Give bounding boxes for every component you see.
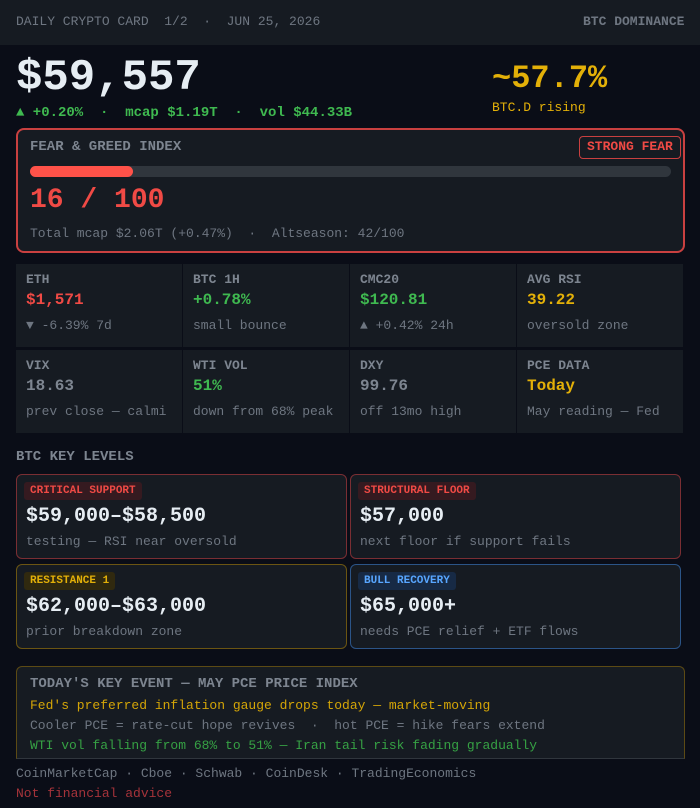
- metric: VIX: [16, 350, 182, 433]
- market cap and altseason: Total mcap $2.06T (+0.47%) · Altseason: 42/100: [30, 226, 404, 241]
- BTC dominance note: BTC.D rising: [492, 100, 586, 115]
- header right label: BTC DOMINANCE: [583, 14, 684, 29]
- note: prior breakdown zone: [26, 624, 182, 639]
- panel: fear and greed: [16, 128, 685, 253]
- BTC price: $59,557: [16, 53, 201, 103]
- price: $65,000+: [360, 595, 456, 618]
- price range: $62,000–$63,000: [26, 595, 206, 618]
- level card: structural floor: [350, 474, 681, 559]
- badge: CRITICAL SUPPORT: [30, 485, 136, 497]
- sources: CoinMarketCap · Cboe · Schwab · CoinDesk · TradingEconomics: [16, 766, 476, 781]
- metric grid: [16, 264, 683, 433]
- metric: VIX: VIX: [26, 358, 49, 373]
- metric: PCE DATA: Today: [527, 377, 575, 395]
- metric: PCE DATA: [517, 350, 683, 433]
- badge: [358, 572, 456, 590]
- badge: BULL RECOVERY: [364, 575, 450, 587]
- badge: [24, 482, 142, 500]
- event line: grey: Cooler PCE = rate-cut hope revives · hot PCE = hike fears extend: [30, 718, 545, 733]
- metric: BTC 1H: BTC 1H: [193, 272, 240, 287]
- metric: WTI VOL: down from 68% peak: [193, 404, 333, 419]
- metric: ETH: $1,571: [26, 291, 84, 309]
- metric: ETH: ETH: [26, 272, 49, 287]
- strong fear badge: STRONG FEAR: [587, 139, 673, 154]
- metric: DXY: DXY: [360, 358, 383, 373]
- metric: WTI VOL: [183, 350, 349, 433]
- metric: CMC20: [350, 264, 516, 347]
- metric: DXY: off 13mo high: [360, 404, 461, 419]
- badge: [24, 572, 115, 590]
- fear and greed heading: FEAR & GREED INDEX: [30, 139, 181, 155]
- metric: AVG RSI: AVG RSI: [527, 272, 582, 287]
- header bar: [0, 0, 700, 45]
- metric: VIX: prev close — calmi: [26, 404, 166, 419]
- gauge fill: [30, 166, 133, 177]
- gauge track: [30, 166, 671, 177]
- metric: WTI VOL: 51%: [193, 377, 222, 395]
- event heading: TODAY'S KEY EVENT — MAY PCE PRICE INDEX: [30, 676, 358, 692]
- key levels heading: BTC KEY LEVELS: [16, 449, 134, 465]
- BTC dominance value: ~57.7%: [492, 60, 607, 97]
- metric: PCE DATA: PCE DATA: [527, 358, 589, 373]
- metric: PCE DATA: May reading — Fed: [527, 404, 660, 419]
- badge: [358, 482, 476, 500]
- note: needs PCE relief + ETF flows: [360, 624, 578, 639]
- metric: AVG RSI: [517, 264, 683, 347]
- metric: DXY: 99.76: [360, 377, 408, 395]
- metric: AVG RSI: 39.22: [527, 291, 575, 309]
- metric: BTC 1H: +0.78%: [193, 291, 251, 309]
- price range: $59,000–$58,500: [26, 505, 206, 528]
- panel: key event: [16, 666, 685, 759]
- metric: CMC20: ▲ +0.42% 24h: [360, 318, 454, 333]
- metric: VIX: 18.63: [26, 377, 74, 395]
- metric: WTI VOL: WTI VOL: [193, 358, 248, 373]
- metric: ETH: ▼ -6.39% 7d: [26, 318, 112, 333]
- metric: BTC 1H: small bounce: [193, 318, 287, 333]
- note: testing — RSI near oversold: [26, 534, 237, 549]
- event line: amber: Fed's preferred inflation gauge drops today — market-moving: [30, 698, 490, 713]
- metric: DXY: [350, 350, 516, 433]
- metric: BTC 1H: [183, 264, 349, 347]
- badge: STRUCTURAL FLOOR: [364, 485, 470, 497]
- metric: CMC20: CMC20: [360, 272, 399, 287]
- price change stats: ▲ +0.20% · mcap $1.19T · vol $44.33B: [16, 105, 352, 121]
- header title and date: DAILY CRYPTO CARD 1/2 · JUN 25, 2026: [16, 14, 320, 29]
- disclaimer: Not financial advice: [16, 786, 172, 801]
- level card: bull recovery: [350, 564, 681, 649]
- badge: RESISTANCE 1: [30, 575, 109, 587]
- metric: AVG RSI: oversold zone: [527, 318, 628, 333]
- metric: ETH: [16, 264, 182, 347]
- fear and greed score: 16 / 100: [30, 185, 164, 216]
- price: $57,000: [360, 505, 444, 528]
- strong fear badge: [579, 136, 681, 159]
- level card: critical support: [16, 474, 347, 559]
- metric: CMC20: $120.81: [360, 291, 427, 309]
- event line: green: WTI vol falling from 68% to 51% — Iran tail risk fading gradually: [30, 738, 537, 753]
- level card: resistance 1: [16, 564, 347, 649]
- note: next floor if support fails: [360, 534, 571, 549]
